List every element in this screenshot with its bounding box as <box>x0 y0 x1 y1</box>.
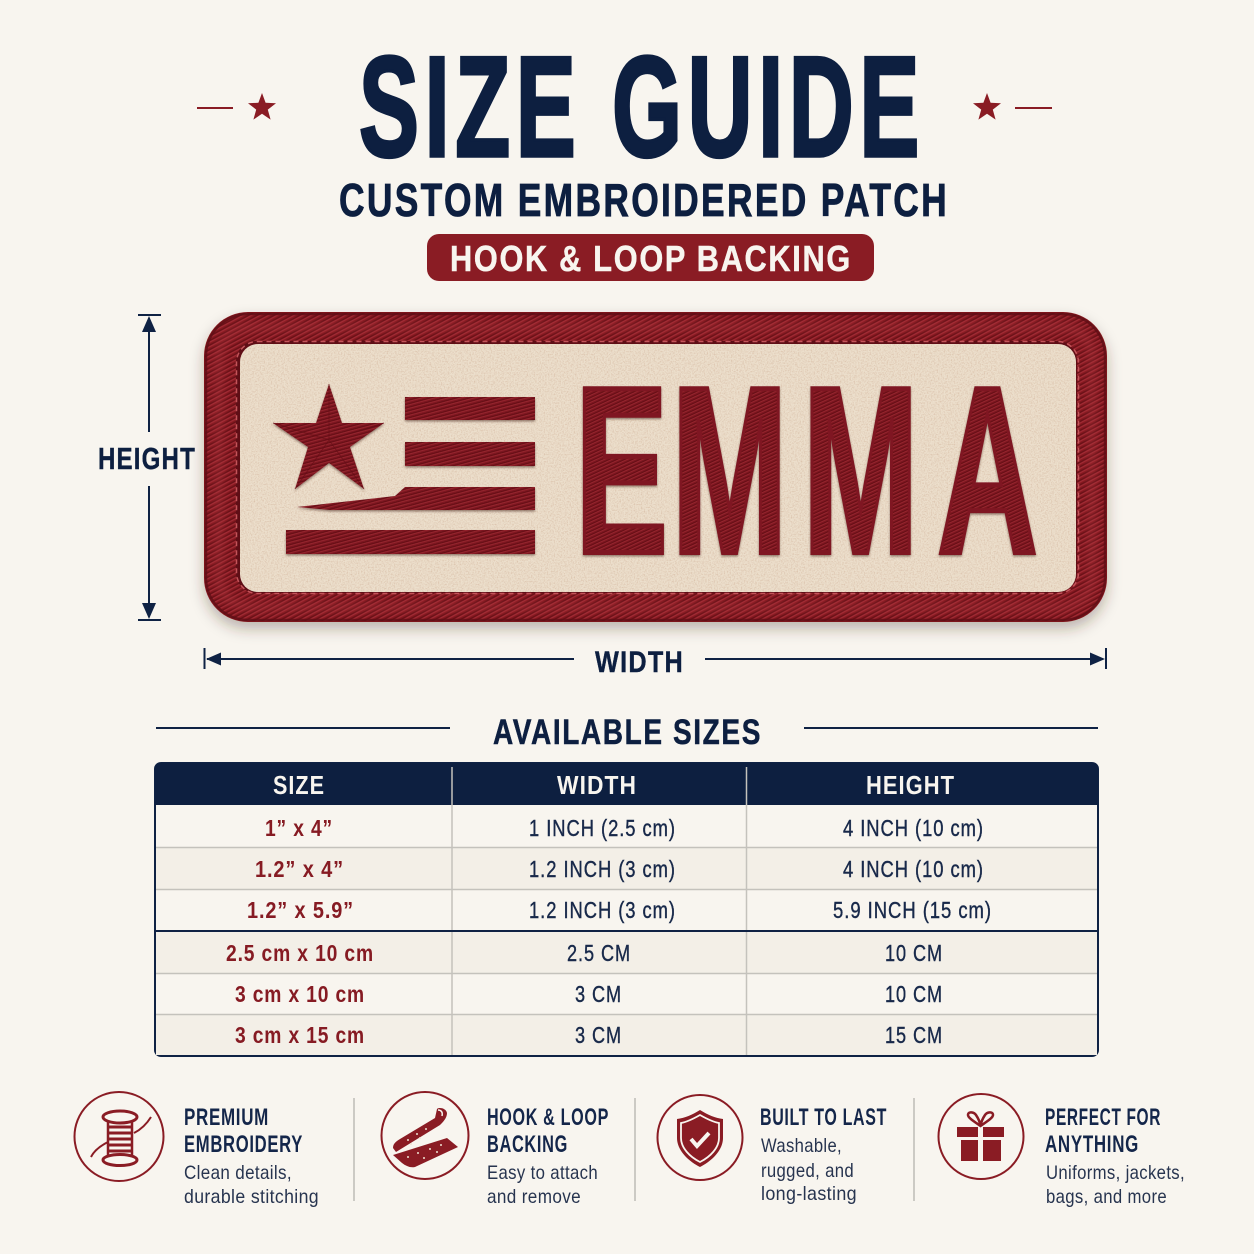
row: 2.5 x 10 cm: 2.5 cm x 10 cm <box>226 940 374 966</box>
patch border <box>204 312 1107 622</box>
text: built to last: BUILT TO LAST <box>760 1104 887 1131</box>
subtitle: CUSTOM EMBROIDERED PATCH <box>339 174 949 226</box>
text: premium embroidery: Clean details, <box>184 1162 292 1184</box>
icon: shield with check <box>658 1095 742 1180</box>
patch star <box>273 384 384 489</box>
row: 1 x 4 in: 4 INCH (10 cm) <box>843 815 984 841</box>
row: 3 x 10 cm: 10 CM <box>885 981 943 1007</box>
text: hook and loop backing: Easy to attach <box>487 1162 598 1184</box>
text: perfect for anything <box>1045 1104 1185 1208</box>
patch flag stripes <box>286 397 535 554</box>
feature: built to last <box>658 1095 887 1205</box>
row: 2.5 x 10 cm: 2.5 CM <box>567 940 631 966</box>
height dimension arrow <box>98 315 196 620</box>
table header: WIDTH <box>557 770 637 800</box>
row: 1 x 4 in: 1 INCH (2.5 cm) <box>529 815 676 841</box>
badge: backing type: HOOK & LOOP BACKING <box>450 238 852 279</box>
feature: premium embroidery <box>74 1092 319 1208</box>
table header: HEIGHT <box>866 770 955 800</box>
feature: perfect for anything <box>938 1094 1185 1208</box>
table header <box>155 763 1098 805</box>
text: built to last: long-lasting <box>761 1183 857 1205</box>
row: 1.2 x 5.9 in: 1.2” x 5.9” <box>247 897 354 923</box>
icon: hook and loop strips <box>382 1092 468 1179</box>
row: 3 x 15 cm <box>235 1022 943 1048</box>
row: 1.2 x 5.9 in: 5.9 INCH (15 cm) <box>833 897 992 923</box>
section heading: available sizes: AVAILABLE SIZES <box>493 713 762 752</box>
row: 1.2 x 4 in: 1.2 INCH (3 cm) <box>529 856 676 882</box>
text: built to last: rugged, and <box>761 1160 854 1182</box>
text: perfect for anything: bags, and more <box>1046 1186 1167 1208</box>
icon: thread spool <box>74 1092 164 1181</box>
text: perfect for anything: Uniforms, jackets, <box>1046 1162 1185 1184</box>
icon: gift box <box>938 1094 1024 1179</box>
table header: SIZE <box>273 770 325 800</box>
row: 2.5 x 10 cm: 10 CM <box>885 940 943 966</box>
row: 2.5 x 10 cm <box>226 940 943 966</box>
panel: embroidered patch <box>204 312 1107 622</box>
text: hook and loop backing: and remove <box>487 1186 581 1208</box>
row: 1 x 4 in: 1” x 4” <box>265 815 333 841</box>
text: premium embroidery <box>184 1104 319 1208</box>
feature: hook and loop backing <box>382 1092 609 1208</box>
row: 3 x 15 cm: 3 CM <box>575 1022 622 1048</box>
row: 1.2 x 5.9 in: 1.2 INCH (3 cm) <box>529 897 676 923</box>
patch fabric <box>236 341 1078 594</box>
row: 3 x 10 cm: 3 cm x 10 cm <box>235 981 365 1007</box>
table body <box>155 763 1098 1056</box>
text: premium embroidery: PREMIUM <box>184 1104 269 1131</box>
row: 1.2 x 4 in <box>255 856 984 882</box>
text: premium embroidery: EMBROIDERY <box>184 1131 303 1158</box>
height dimension arrow: HEIGHT <box>98 441 196 476</box>
row: 3 x 10 cm: 3 CM <box>575 981 622 1007</box>
text: premium embroidery: durable stitching <box>184 1186 319 1208</box>
row: 1.2 x 4 in: 4 INCH (10 cm) <box>843 856 984 882</box>
title: SIZE GUIDE <box>359 28 925 187</box>
icon: right star ornament <box>973 93 1052 120</box>
text: hook and loop backing <box>487 1104 609 1208</box>
row: 1.2 x 5.9 in <box>247 897 992 923</box>
text: built to last <box>760 1104 887 1205</box>
row: 1.2 x 4 in: 1.2” x 4” <box>255 856 344 882</box>
text: hook and loop backing: HOOK & LOOP <box>487 1104 609 1131</box>
text: hook and loop backing: BACKING <box>487 1131 568 1158</box>
text: perfect for anything: PERFECT FOR <box>1045 1104 1161 1131</box>
width dimension arrow: WIDTH <box>595 646 684 679</box>
row: 3 x 10 cm <box>235 981 943 1007</box>
icon: left star ornament <box>197 93 276 120</box>
width dimension arrow <box>204 646 1106 679</box>
table: sizes <box>155 763 1098 1056</box>
row: 3 x 15 cm: 3 cm x 15 cm <box>235 1022 365 1048</box>
text: perfect for anything: ANYTHING <box>1045 1131 1139 1158</box>
row: 3 x 15 cm: 15 CM <box>885 1022 943 1048</box>
patch name: EMMA <box>575 338 1038 604</box>
row: 1 x 4 in <box>265 815 984 841</box>
text: built to last: Washable, <box>761 1135 842 1157</box>
